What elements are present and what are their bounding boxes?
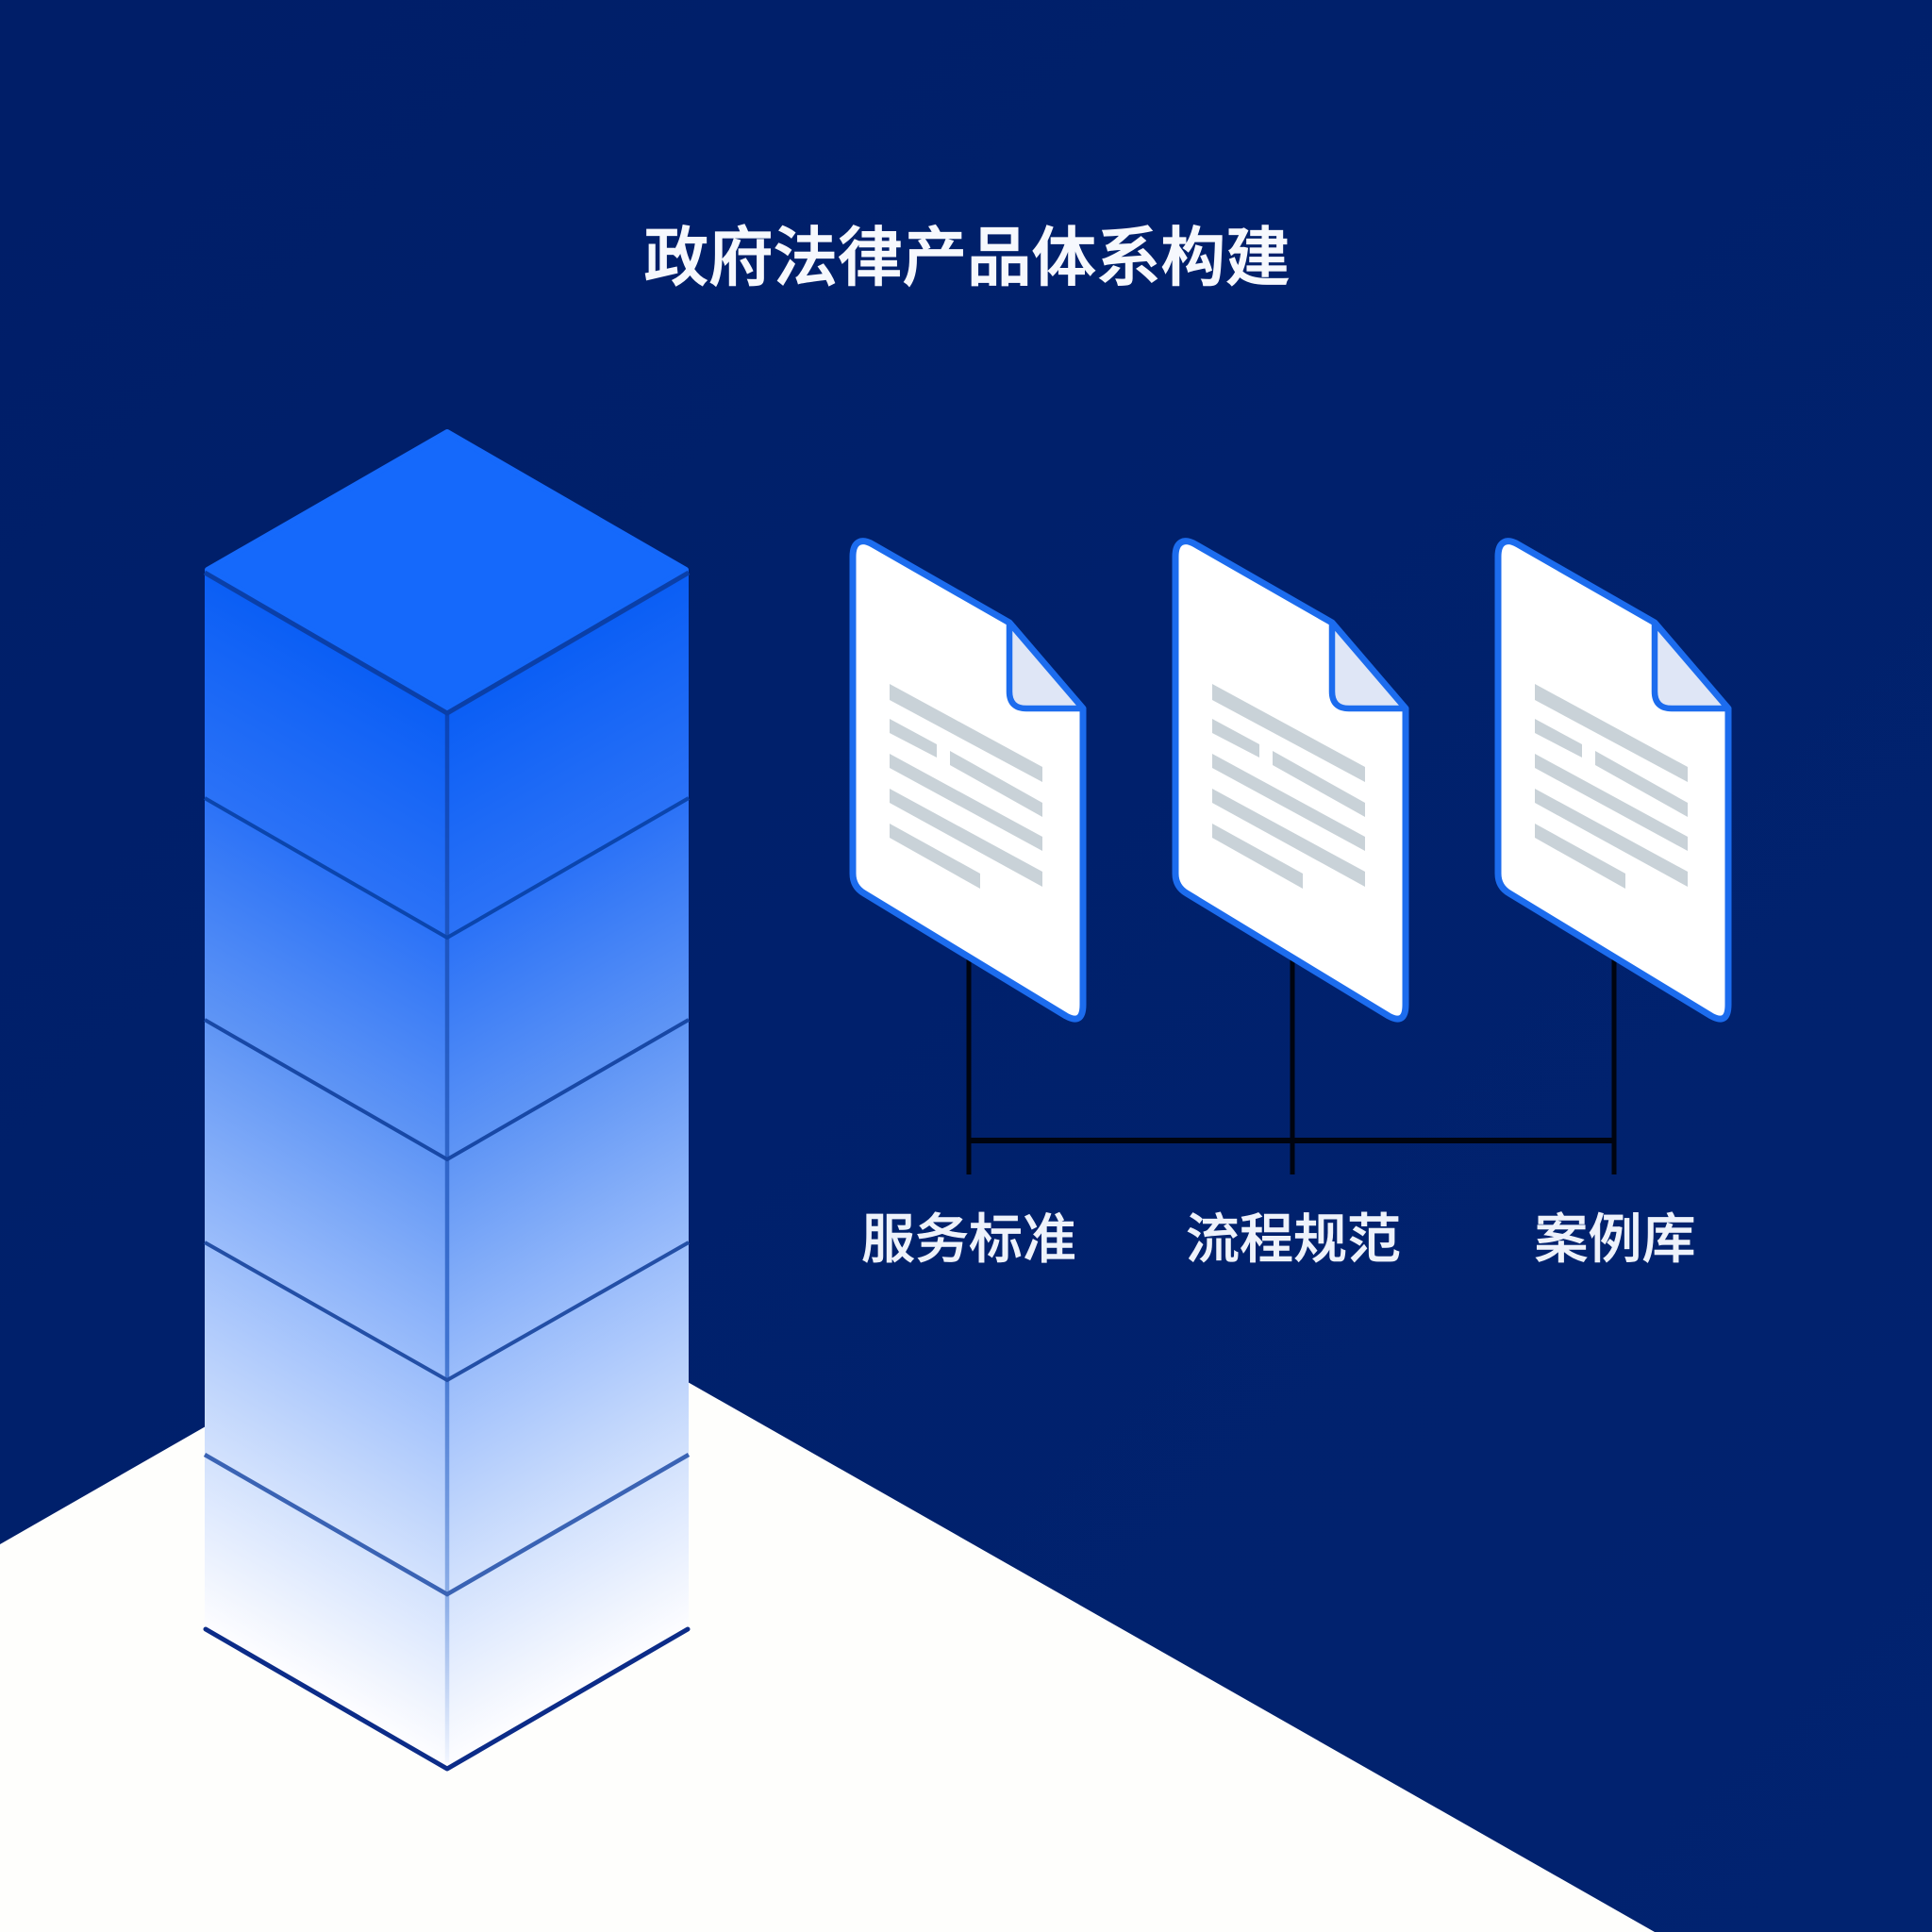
tier divider 3 bbox=[205, 1020, 689, 1159]
white floor bbox=[0, 1382, 1655, 1932]
document 2: 流程规范 bbox=[1175, 541, 1406, 1019]
document page bbox=[853, 541, 1083, 1019]
tower right face bbox=[447, 571, 689, 1769]
tower vertical edge bbox=[445, 713, 449, 1762]
title: 政府法律产品体系构建 bbox=[643, 222, 1291, 294]
text lines bbox=[1535, 684, 1688, 889]
tower left face bbox=[205, 571, 447, 1769]
folded corner bbox=[1009, 623, 1083, 708]
document 3: 案例库 bbox=[1498, 541, 1728, 1019]
tier divider 2 bbox=[205, 798, 689, 938]
isometric tower bbox=[205, 432, 689, 1769]
document page bbox=[1175, 541, 1406, 1019]
folded corner bbox=[1332, 623, 1406, 708]
tier divider 5 bbox=[205, 1455, 689, 1594]
folded corner bbox=[1655, 623, 1728, 708]
tower top face bbox=[208, 432, 686, 709]
tower base outline bbox=[206, 1629, 688, 1769]
tier divider 1 bbox=[205, 573, 689, 713]
tier divider 4 bbox=[205, 1242, 689, 1380]
connector lines bbox=[969, 943, 1614, 1174]
document 1: 服务标准 bbox=[853, 541, 1083, 1019]
document page bbox=[1498, 541, 1728, 1019]
label: 流程规范: 流程规范 bbox=[1186, 1209, 1401, 1270]
label: 案例库: 案例库 bbox=[1534, 1209, 1696, 1270]
label: 服务标准: 服务标准 bbox=[861, 1209, 1076, 1270]
text lines bbox=[890, 684, 1042, 889]
text lines bbox=[1212, 684, 1365, 889]
